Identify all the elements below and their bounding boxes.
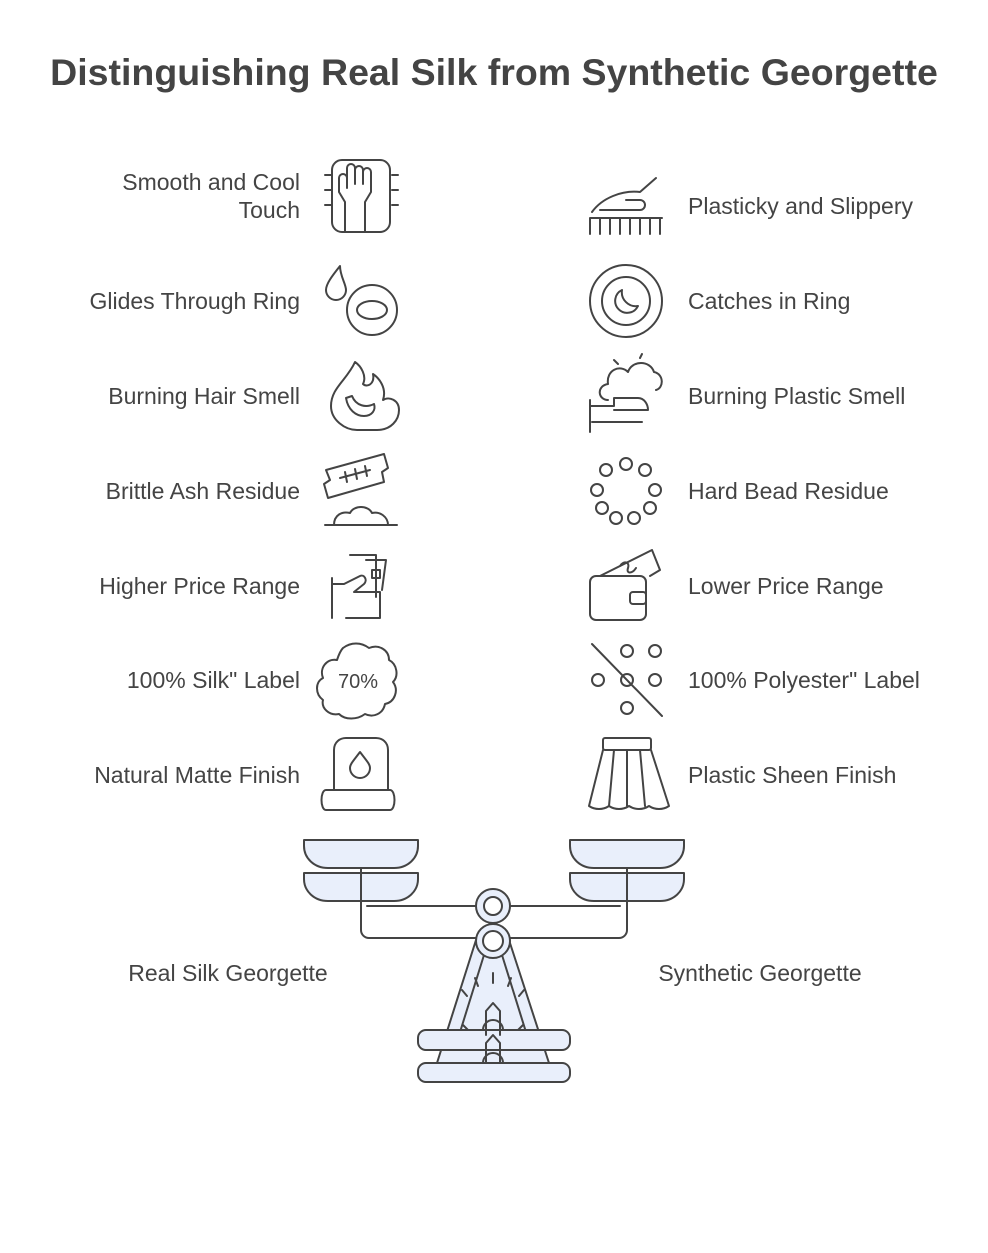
icon: towel with drop [322, 738, 394, 810]
label: Higher Price Range: Higher Price Range [99, 573, 300, 599]
label: Hard Bead Residue: Hard Bead Residue [688, 478, 889, 504]
right pans [570, 840, 684, 868]
icon: flame [331, 362, 399, 430]
label: Smooth and Cool Touch: Smooth and Cool [122, 169, 300, 195]
icon: drop and ring [326, 266, 397, 335]
label: 100% Silk Label: 100% Silk" Label [127, 667, 300, 693]
title: Distinguishing Real Silk from Synthetic Georgette [50, 51, 938, 93]
label: Lower Price Range: Lower Price Range [688, 573, 884, 599]
label: 100% Polyester Label: 100% Polyester" Label [688, 667, 920, 693]
label: Burning Hair Smell: Burning Hair Smell [108, 383, 300, 409]
icon: dots with slash [592, 644, 662, 716]
icon text: 70%: 70% [338, 671, 378, 693]
label: Burning Plastic Smell: Burning Plastic Smell [688, 383, 905, 409]
icon: wallet [590, 550, 660, 620]
base plates [418, 1030, 570, 1050]
pivot rings [476, 889, 510, 923]
stand triangle [437, 940, 549, 1063]
icon: smoke hand [590, 354, 662, 432]
label: Synthetic Georgette: Synthetic Georgette [658, 960, 862, 986]
label: Smooth and Cool Touch: Touch [239, 197, 300, 223]
label: Natural Matte Finish: Natural Matte Finish [94, 762, 300, 788]
icon: ring with moon [590, 265, 662, 337]
icon: hand with phone [332, 555, 386, 618]
left pans [304, 840, 418, 868]
beams [361, 868, 627, 938]
label: Real Silk Georgette: Real Silk Georgette [128, 960, 328, 986]
label: Catches in Ring: Catches in Ring [688, 288, 850, 314]
icon: razor and ash [324, 454, 397, 525]
icon: skirt [589, 738, 669, 809]
label: Plasticky and Slippery: Plasticky and Slippery [688, 193, 913, 219]
needle and ticks [462, 973, 524, 1063]
label: Plastic Sheen Finish: Plastic Sheen Finish [688, 762, 896, 788]
icon: beads circle [591, 458, 661, 524]
icon: 70% badge [317, 644, 396, 718]
scale illustration [304, 840, 684, 1082]
label: Brittle Ash Residue: Brittle Ash Residue [106, 478, 300, 504]
label: Glides Through Ring: Glides Through Ring [89, 288, 300, 314]
icon: hand touch [325, 160, 398, 232]
icon: hand on comb [590, 178, 662, 234]
